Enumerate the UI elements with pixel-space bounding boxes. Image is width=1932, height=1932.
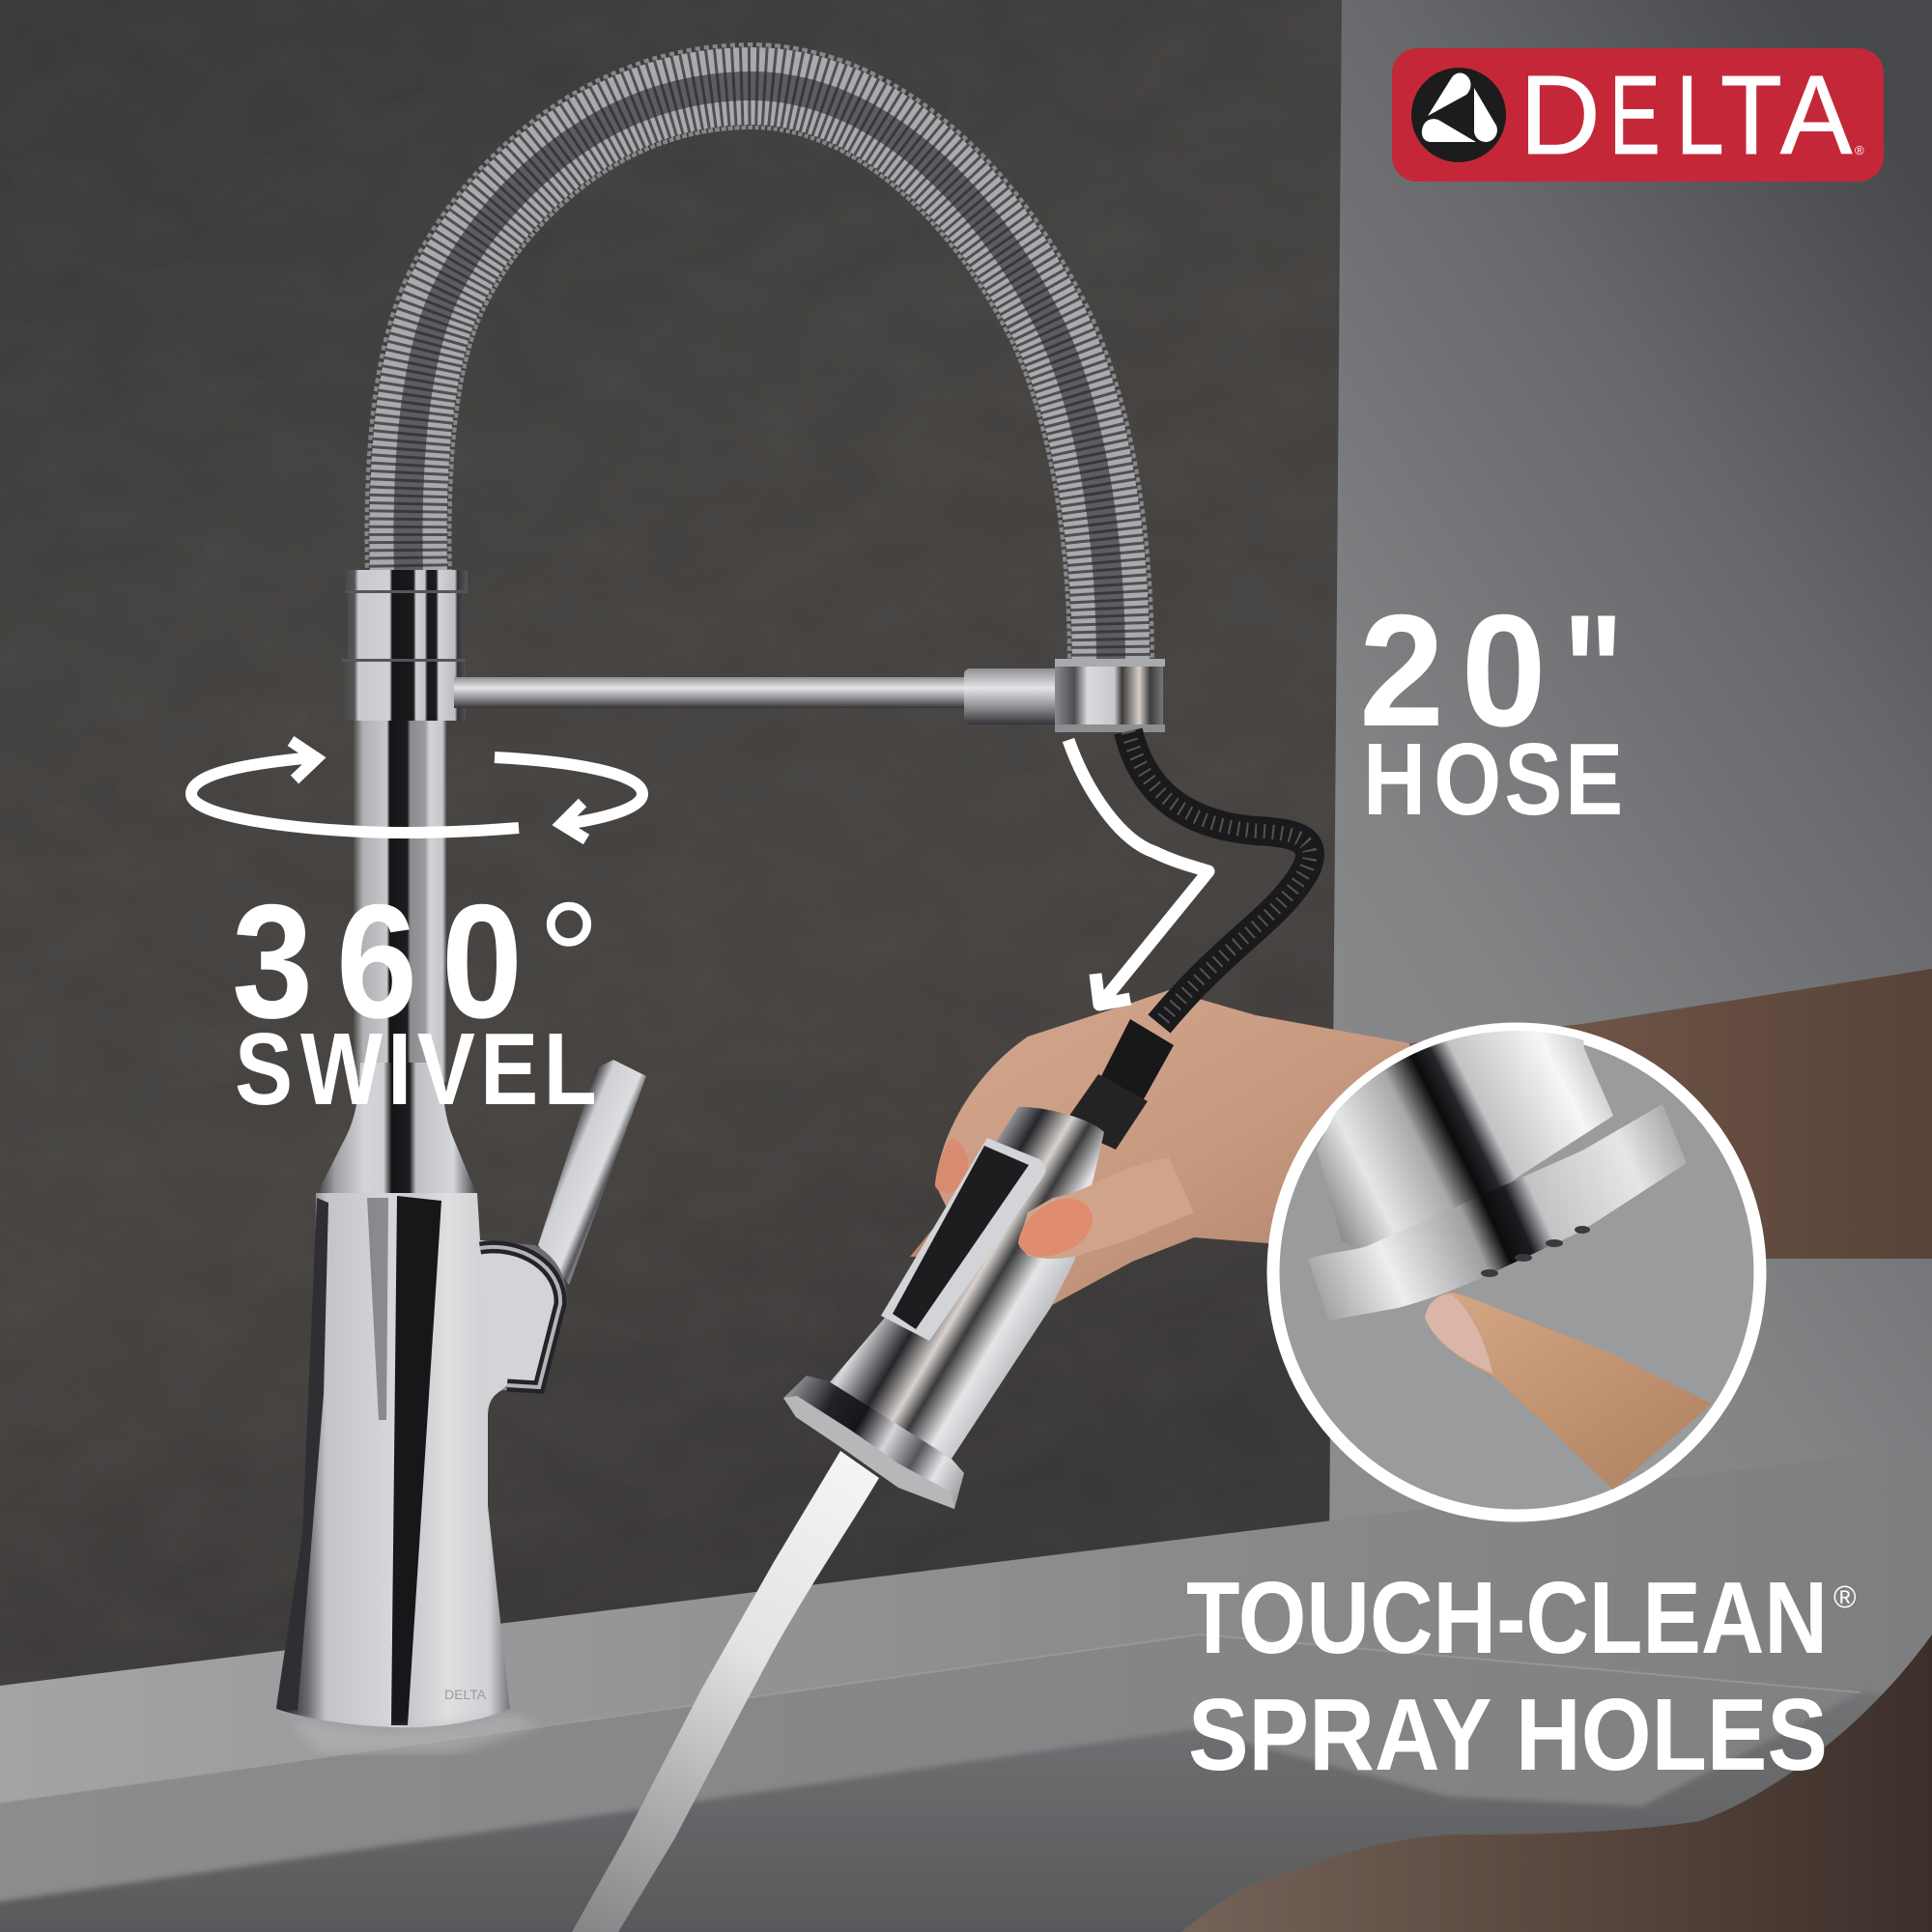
wordmark: E — [1609, 53, 1661, 179]
20 inch label: 20 — [1359, 582, 1547, 760]
spray button — [881, 1138, 1046, 1341]
logo mark — [1411, 68, 1506, 162]
base reflection — [290, 1715, 541, 1753]
faucet — [276, 86, 1165, 1753]
spray body — [829, 1107, 1104, 1459]
spring arch — [408, 86, 1111, 667]
handle swoop — [478, 1247, 560, 1401]
wordmark: T — [1720, 53, 1782, 178]
collar — [342, 570, 468, 721]
black braided hose — [1128, 731, 1310, 1024]
spray holes — [1481, 1226, 1590, 1277]
swivel arrows — [191, 741, 642, 839]
coupling and elbow — [964, 659, 1165, 732]
background: dark textured wall — [0, 0, 1342, 1739]
arm and hand in the foreground bottom right — [1181, 1634, 1932, 1932]
360 degrees label: 360 — [232, 870, 523, 1052]
body dark stripes — [276, 1196, 441, 1725]
spray holes label: SPRAY HOLES — [1188, 1678, 1828, 1792]
360 degrees label: ° — [537, 869, 601, 1047]
20 inch label: " — [1563, 582, 1624, 759]
hose arrow — [1068, 740, 1208, 1005]
pipe column — [354, 715, 446, 1082]
touch-clean label: ® — [1833, 1579, 1857, 1614]
wordmark: A — [1780, 53, 1852, 179]
handle lever — [538, 1060, 646, 1285]
spray head — [572, 1107, 1104, 1932]
touch-clean label: TOUCH-CLEAN — [1186, 1561, 1828, 1675]
chrome flange — [1308, 1104, 1687, 1321]
callout circle: touch-clean detail — [1273, 1005, 1760, 1516]
index finger over the spray head — [1018, 1157, 1194, 1259]
countertop — [0, 1446, 1932, 1932]
wordmark: L — [1676, 52, 1724, 178]
hand holding the spray head — [910, 969, 1932, 1305]
wordmark — [1520, 52, 1852, 179]
base neck — [316, 1063, 477, 1196]
flange spray face — [783, 1396, 954, 1509]
hose label: HOSE — [1363, 722, 1623, 837]
water stream — [572, 1451, 879, 1932]
faucet body — [276, 1193, 566, 1727]
flange — [783, 1376, 964, 1509]
Delta logo: ® — [1855, 143, 1864, 157]
horizontal bar — [454, 677, 974, 708]
wordmark: D — [1520, 52, 1601, 178]
chrome bell — [1317, 1031, 1613, 1248]
fingertip — [1425, 1293, 1712, 1490]
Delta logo — [1392, 48, 1884, 182]
hose connector — [1063, 1019, 1174, 1150]
swivel label: SWIVEL — [235, 1011, 597, 1126]
engraved logo: DELTA — [444, 1687, 487, 1702]
background: right grey wall — [1323, 0, 1932, 1546]
